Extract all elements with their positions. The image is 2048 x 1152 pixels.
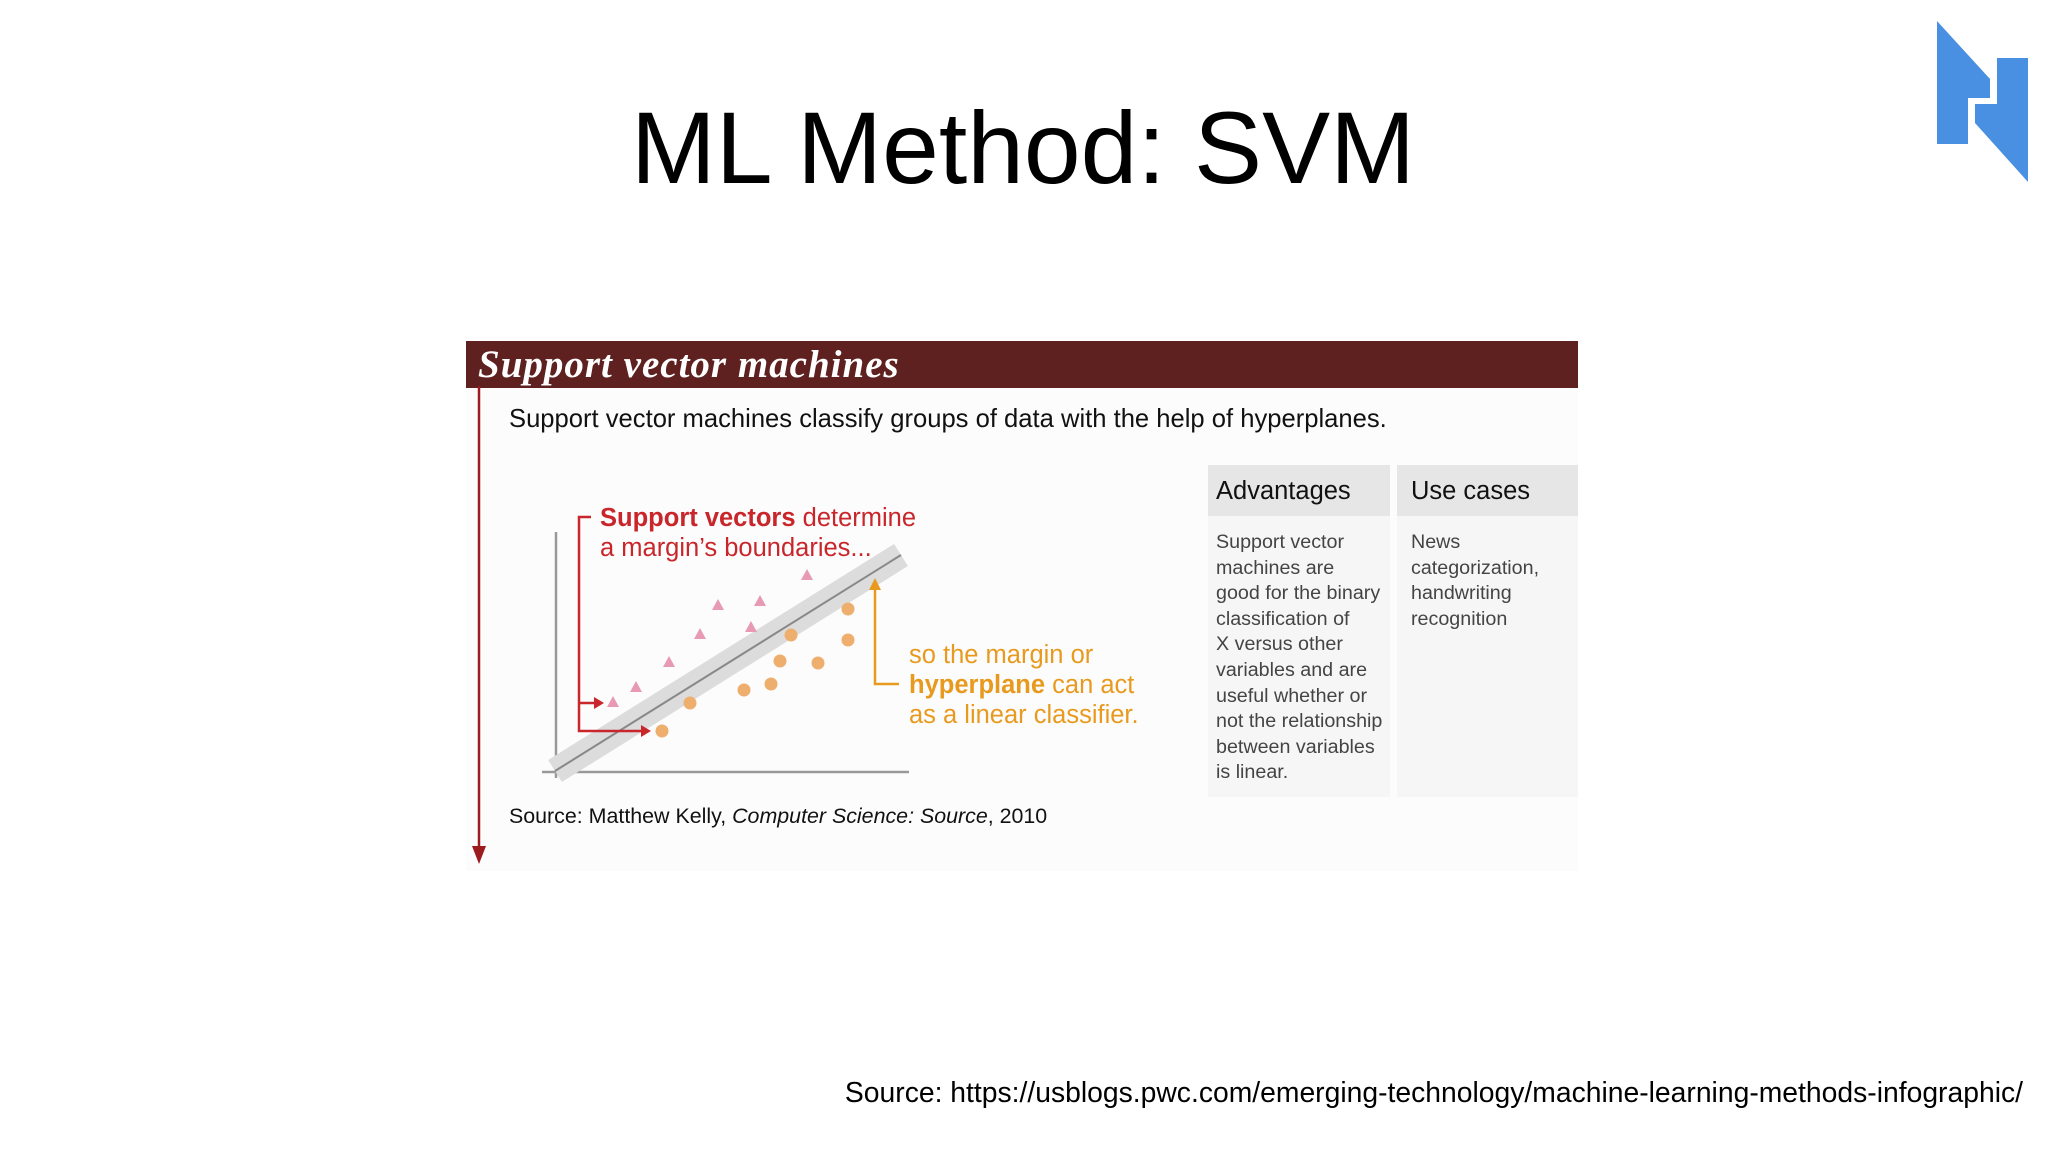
label: hyperplane: hyperplane can act [909,671,1134,699]
panel: support vector machines [466,341,1578,871]
label: support vectors: Support vectors determine [600,504,916,532]
margin band [555,555,901,771]
use cases text [1411,531,1539,630]
advantages column [1208,465,1390,797]
advantages text: variables and are [1216,659,1367,681]
advantages text [1216,531,1382,783]
use cases header [1397,465,1578,516]
label: hyperplane: as a linear classifier. [909,701,1139,729]
triangles [607,569,813,707]
label: support vectors: a margin’s boundaries... [600,534,872,562]
advantages text: good for the binary [1216,582,1380,604]
advantages text: classification of [1216,608,1350,630]
advantages text: is linear. [1216,761,1288,783]
title: ML Method: SVM [631,91,1415,205]
advantages text: not the relationship [1216,710,1382,732]
arrow: red vertical [472,386,486,864]
orange arrow [875,586,899,684]
advantages text: X versus other [1216,633,1343,655]
source citation: Source: Matthew Kelly, Computer Science: Source, 2010 [509,804,1047,828]
dots [656,602,854,738]
advantages text: machines are [1216,557,1334,579]
intro text: Support vector machines classify groups of data with the help of hyperplanes. [509,405,1387,433]
use cases text: handwriting [1411,582,1512,604]
chart: svm diagram [542,504,1139,782]
label: support vectors [600,504,916,562]
label: hyperplane [909,641,1139,729]
use cases column [1397,465,1578,797]
advantages text: useful whether or [1216,685,1367,707]
label: hyperplane: so the margin or [909,641,1094,669]
advantages header: Advantages [1216,477,1351,505]
use cases text: recognition [1411,608,1507,630]
advantages text: between variables [1216,736,1375,758]
footer source: Source: https://usblogs.pwc.com/emerging-technology/machine-learning-methods-infographic/ [845,1076,2023,1108]
icon: logo [1937,21,2028,182]
header bar: Support vector machines [478,343,900,386]
use cases text: categorization, [1411,557,1539,579]
use cases header: Use cases [1411,477,1530,505]
use cases text: News [1411,531,1460,553]
advantages text: Support vector [1216,531,1344,553]
axes [542,532,909,778]
header bar [466,341,1578,388]
advantages header [1208,465,1390,516]
red bracket arrows [579,517,645,731]
